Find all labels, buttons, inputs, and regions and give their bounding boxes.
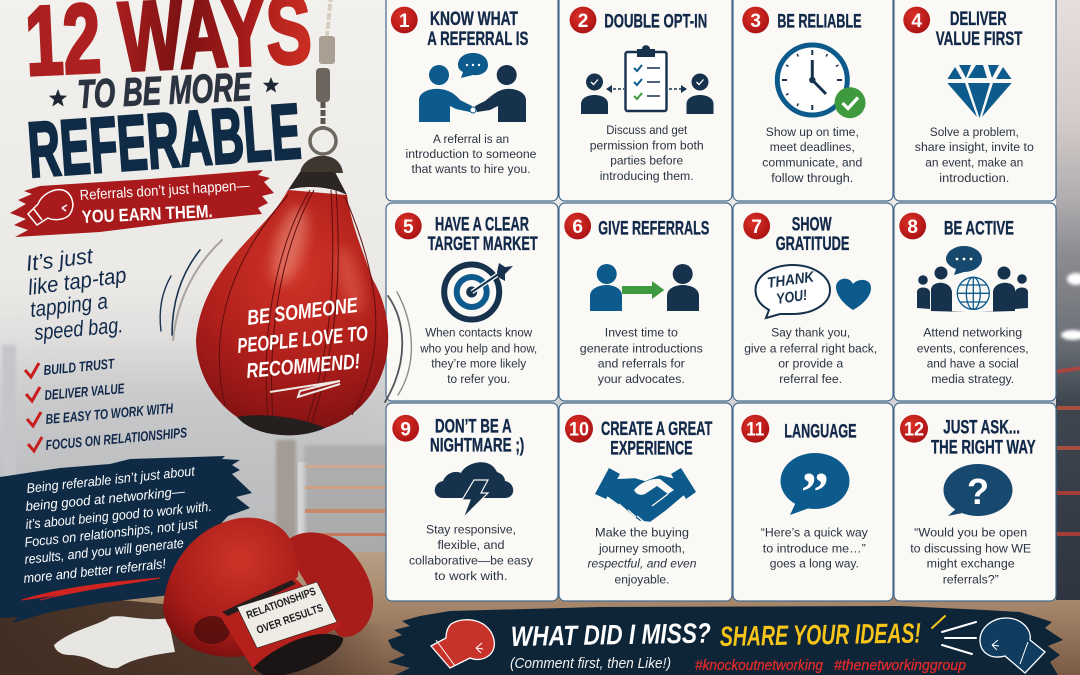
glove label: OVER RESULTS bbox=[255, 602, 325, 637]
banner: referrals don't just happen: YOU EARN THEM. bbox=[81, 201, 213, 227]
badge 6 bbox=[564, 213, 591, 239]
badge 10: 10 bbox=[569, 420, 589, 441]
text 7 bbox=[744, 326, 877, 386]
text 12: referrals?” bbox=[943, 572, 999, 586]
badge 7: 7 bbox=[751, 217, 762, 238]
card 4 bbox=[894, 0, 1056, 201]
heading 10: CREATE A GREAT bbox=[601, 418, 712, 440]
checklist: BE EASY TO WORK WITH bbox=[45, 400, 174, 427]
badge 5: 5 bbox=[403, 217, 414, 238]
hashtags: #knockoutnetworking bbox=[695, 657, 824, 674]
towel bbox=[54, 616, 175, 668]
text 4: share insight, invite to bbox=[915, 140, 1034, 154]
text 9: collaborative—be easy bbox=[409, 553, 534, 567]
icon: red glove bbox=[431, 620, 494, 668]
glove label bbox=[237, 582, 337, 648]
text 12: “Would you be open bbox=[914, 526, 1027, 540]
heading 5 bbox=[428, 214, 538, 255]
motion sparks bbox=[932, 616, 976, 654]
text 10: enjoyable. bbox=[614, 572, 670, 586]
text 6: generate introductions bbox=[580, 341, 703, 355]
icon: clock with check bbox=[777, 45, 866, 118]
text 8: and have a social bbox=[927, 357, 1019, 371]
heading 2: DOUBLE OPT-IN bbox=[604, 11, 707, 33]
hashtags: #thenetworkinggroup bbox=[834, 657, 966, 674]
text 1: that wants to hire you. bbox=[412, 162, 530, 176]
badge 2: 2 bbox=[578, 11, 588, 32]
text 1: A referral is an bbox=[433, 132, 509, 146]
heading 8: BE ACTIVE bbox=[944, 217, 1014, 239]
text 2 bbox=[590, 123, 704, 183]
card 12 bbox=[894, 403, 1056, 601]
heading 10 bbox=[601, 418, 712, 459]
banner: referrals don't just happen: Referrals don’t just happen— bbox=[79, 178, 250, 204]
heading 7 bbox=[776, 214, 849, 255]
text 3: meet deadlines, bbox=[770, 140, 855, 154]
icon: networking people and globe bbox=[917, 246, 1028, 312]
bag text: RECOMMEND! bbox=[245, 350, 361, 383]
handwritten note: like tap-tap bbox=[26, 262, 128, 300]
grid of cards bbox=[386, 0, 1056, 601]
bag text: BE SOMEONE bbox=[246, 294, 360, 330]
title: referable: REFERABLE bbox=[25, 87, 304, 194]
card 6 bbox=[559, 203, 732, 401]
text 7: referral fee. bbox=[779, 372, 842, 386]
text 8: media strategy. bbox=[931, 372, 1014, 386]
badge 4: 4 bbox=[911, 11, 922, 32]
card 2 bbox=[559, 0, 732, 201]
text 10 bbox=[588, 526, 697, 586]
text 3: communicate, and bbox=[762, 156, 862, 170]
icon: blue glove bbox=[980, 618, 1045, 673]
text 11: to introduce me…” bbox=[763, 541, 866, 555]
text 10: Make the buying bbox=[595, 526, 689, 540]
checklist: DELIVER VALUE bbox=[44, 380, 125, 403]
text 2: introducing them. bbox=[600, 169, 694, 183]
text 10: journey smooth, bbox=[598, 541, 685, 555]
badge 9 bbox=[392, 415, 419, 442]
motion lines bbox=[160, 240, 411, 402]
boxing gloves bbox=[163, 518, 373, 675]
heading 12: THE RIGHT WAY bbox=[931, 436, 1036, 458]
panel: navy brush note bbox=[0, 456, 252, 623]
heading 6: GIVE REFERRALS bbox=[598, 217, 709, 239]
text 5: to refer you. bbox=[447, 372, 510, 386]
card 9 bbox=[386, 403, 558, 601]
badge 3: 3 bbox=[750, 11, 761, 32]
text 6: Invest time to bbox=[605, 326, 678, 340]
card 5 bbox=[386, 203, 558, 401]
heading 9: NIGHTMARE ;) bbox=[430, 435, 524, 457]
speed bag chain bbox=[300, 0, 343, 173]
heading 9 bbox=[430, 415, 524, 457]
checklist: FOCUS ON RELATIONSHIPS bbox=[45, 424, 188, 453]
text 6 bbox=[580, 326, 703, 386]
text 6: your advocates. bbox=[598, 372, 685, 386]
heading 11: LANGUAGE bbox=[784, 420, 857, 442]
text 8 bbox=[917, 326, 1029, 386]
icon: question bubble: ? bbox=[967, 471, 989, 512]
handwritten note: speed bag. bbox=[33, 312, 124, 345]
badge 10 bbox=[565, 415, 593, 443]
icon: handshake bbox=[595, 468, 696, 522]
subtitle: to be more: TO BE MORE bbox=[76, 65, 253, 117]
text 2: Discuss and get bbox=[606, 123, 688, 137]
text 7: Say thank you, bbox=[771, 326, 850, 340]
heading 3: BE RELIABLE bbox=[777, 11, 862, 33]
text 5 bbox=[419, 326, 537, 386]
text 9: flexible, and bbox=[438, 538, 505, 552]
icon: diamond bbox=[947, 65, 1012, 118]
icon: quote bubble: ” bbox=[801, 462, 829, 524]
text 6: and referrals for bbox=[598, 357, 685, 371]
text 11: “Here’s a quick way bbox=[761, 526, 869, 540]
panel: navy brush note: results, and you will generate bbox=[24, 535, 184, 567]
card 7 bbox=[733, 203, 893, 401]
heading 1: KNOW WHAT bbox=[430, 8, 518, 30]
handwritten note: tapping a bbox=[29, 288, 109, 322]
heading 5: HAVE A CLEAR bbox=[435, 214, 529, 236]
badge 8 bbox=[899, 213, 926, 239]
badge 8: 8 bbox=[907, 217, 918, 238]
panel: navy brush note: more and better referrals! bbox=[23, 556, 167, 586]
icon: thank you bubble and heart: YOU! bbox=[775, 287, 808, 308]
icon: clipboard and two people bbox=[581, 45, 714, 114]
icon: quote bubble bbox=[780, 453, 850, 524]
text 8: events, conferences, bbox=[917, 341, 1029, 355]
badge 11: 11 bbox=[746, 420, 765, 441]
subtitle: to be more bbox=[49, 65, 279, 117]
icon: two people shaking hands bbox=[419, 53, 526, 122]
banner: referrals don't just happen bbox=[10, 170, 274, 237]
icon: target with arrow bbox=[444, 263, 513, 320]
bag text: PEOPLE LOVE TO bbox=[236, 322, 369, 358]
badge 7 bbox=[743, 213, 770, 239]
hashtags bbox=[695, 657, 966, 674]
text 11 bbox=[761, 526, 869, 571]
text 4: introduction. bbox=[939, 171, 1009, 185]
footer banner bbox=[388, 606, 1063, 675]
heading 4: DELIVER bbox=[950, 8, 1007, 30]
badge 11 bbox=[741, 415, 769, 443]
card 11 bbox=[733, 403, 893, 601]
card 10 bbox=[559, 403, 732, 601]
text 5: they’re more likely bbox=[431, 357, 527, 371]
heading 5: TARGET MARKET bbox=[428, 233, 538, 255]
checklist: BUILD TRUST bbox=[43, 355, 116, 378]
badge 12 bbox=[900, 415, 928, 443]
card 3 bbox=[733, 0, 893, 201]
icon: boxing glove outline bbox=[28, 190, 73, 225]
text 9: to work with. bbox=[434, 569, 508, 583]
red underline stroke bbox=[22, 578, 160, 600]
badge 1 bbox=[391, 7, 418, 33]
icon: referral between two people bbox=[590, 264, 699, 311]
badge 4 bbox=[903, 7, 930, 33]
badge 12: 12 bbox=[904, 420, 924, 441]
text 1 bbox=[406, 132, 537, 176]
text 5: who you help and how, bbox=[419, 341, 537, 355]
icon: question bubble bbox=[944, 464, 1012, 516]
heading 9: DON’T BE A bbox=[435, 415, 512, 437]
comment prompt: (Comment first, then Like!) bbox=[510, 655, 671, 672]
badge 6: 6 bbox=[572, 217, 583, 238]
text 12: to discussing how WE bbox=[910, 541, 1031, 555]
checklist bbox=[25, 355, 188, 453]
heading 7: SHOW bbox=[792, 214, 832, 236]
icon: thank you bubble and heart bbox=[756, 265, 871, 318]
heading 12: JUST ASK... bbox=[943, 416, 1020, 438]
text 9 bbox=[409, 522, 534, 583]
heading 1: A REFERRAL IS bbox=[427, 28, 528, 50]
heading 1 bbox=[427, 8, 528, 50]
icon: storm cloud bbox=[435, 462, 513, 518]
text 5: When contacts know bbox=[425, 326, 532, 340]
text 1: introduction to someone bbox=[406, 147, 537, 161]
heading 4: VALUE FIRST bbox=[936, 28, 1022, 50]
handwritten note: It’s just bbox=[25, 243, 95, 276]
badge 2 bbox=[570, 7, 596, 33]
text 10: respectful, and even bbox=[588, 557, 697, 571]
text 7: or provide a bbox=[778, 357, 843, 371]
glove label: RELATIONSHIPS bbox=[245, 586, 318, 622]
badge 9: 9 bbox=[400, 419, 411, 440]
icon: thank you bubble and heart: THANK bbox=[766, 268, 816, 292]
heading: share your ideas: SHARE YOUR IDEAS! bbox=[720, 617, 921, 652]
text 3: follow through. bbox=[771, 171, 853, 185]
heading 12 bbox=[931, 416, 1036, 458]
panel: navy brush note: Being referable isn’t just about bbox=[26, 463, 197, 496]
text 7: give a referral right back, bbox=[744, 341, 877, 355]
text 11: goes a long way. bbox=[770, 557, 859, 571]
heading 7: GRATITUDE bbox=[776, 233, 849, 255]
card 1 bbox=[386, 0, 558, 201]
bag text bbox=[236, 294, 369, 397]
text 3: Show up on time, bbox=[766, 125, 859, 139]
text 4 bbox=[915, 125, 1034, 185]
text 4: an event, make an bbox=[925, 156, 1023, 170]
text 2: permission from both bbox=[590, 139, 704, 153]
badge 3 bbox=[742, 7, 769, 33]
text 2: parties before bbox=[610, 154, 683, 168]
text 4: Solve a problem, bbox=[930, 125, 1019, 139]
speed bag bbox=[196, 172, 388, 435]
text 8: Attend networking bbox=[923, 326, 1022, 340]
panel: navy brush note: being good at networking— bbox=[25, 484, 186, 514]
text 12 bbox=[910, 526, 1031, 586]
heading 10: EXPERIENCE bbox=[610, 437, 693, 459]
handwritten note bbox=[25, 243, 128, 345]
badge 5 bbox=[395, 213, 422, 239]
heading 4 bbox=[936, 8, 1022, 50]
heading: what did i miss: WHAT DID I MISS? bbox=[511, 618, 711, 652]
panel: navy brush note: Focus on relationships, not just bbox=[24, 516, 199, 550]
text 12: might exchange bbox=[927, 557, 1015, 571]
badge 1: 1 bbox=[399, 11, 410, 32]
card 8 bbox=[894, 203, 1056, 401]
text 9: Stay responsive, bbox=[426, 522, 516, 536]
panel: navy brush note: it’s about being good to work with. bbox=[25, 499, 212, 532]
text 3 bbox=[762, 125, 862, 185]
